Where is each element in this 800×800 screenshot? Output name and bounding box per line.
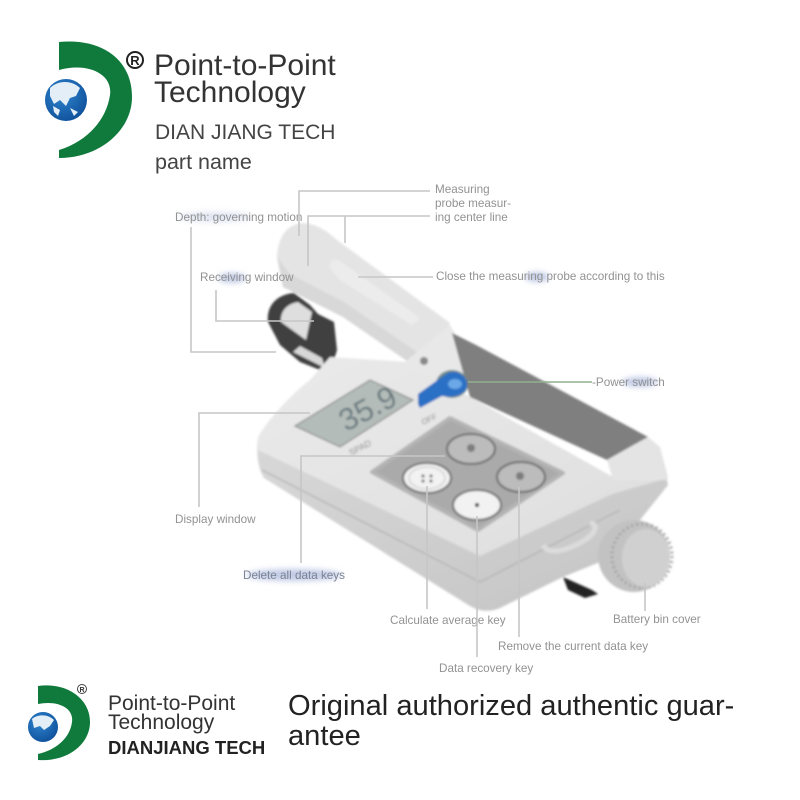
text: authenticity guarantee bbox=[288, 690, 734, 752]
logo: bottom crescent and globe bbox=[28, 684, 90, 760]
callout: data recovery key: Data recovery key bbox=[439, 662, 533, 675]
callout: remove current data key: Remove the current data key bbox=[498, 640, 648, 653]
text: DIAN JIANG TECH: DIAN JIANG TECH bbox=[155, 121, 335, 144]
logo: bottom crescent and globe: R bbox=[79, 687, 85, 694]
text: footer brand: DIANJIANG TECH bbox=[108, 737, 265, 758]
logo: top crescent and globe bbox=[45, 41, 143, 158]
key: delete all bbox=[447, 434, 495, 464]
clamp bbox=[268, 293, 337, 374]
key: calculate average bbox=[403, 463, 451, 493]
callout: depth governing motion bbox=[175, 211, 302, 352]
callout: display window bbox=[175, 413, 310, 526]
battery cover dial bbox=[588, 510, 680, 602]
heading: company name: Technology bbox=[154, 76, 306, 109]
heading: footer company name: Technology bbox=[108, 711, 215, 734]
callout: depth governing motion: Depth: governing motion bbox=[175, 211, 302, 224]
callout: display window: Display window bbox=[175, 513, 256, 526]
strap loop bbox=[543, 523, 595, 551]
callout: measuring probe center line: probe measur- bbox=[435, 197, 511, 210]
callout: receiving window bbox=[200, 271, 314, 321]
heading: company name bbox=[154, 49, 336, 109]
device side body bbox=[257, 438, 668, 611]
off label: OFF bbox=[420, 412, 438, 427]
heading: footer company name: Point-to-Point bbox=[108, 692, 235, 715]
blue blotches behind labels bbox=[179, 212, 658, 581]
heading: company name: Point-to-Point bbox=[154, 49, 336, 82]
key: remove current bbox=[497, 462, 545, 492]
callout: calculate average key: Calculate average key bbox=[390, 614, 506, 627]
hinge bbox=[405, 325, 470, 393]
callout: battery bin cover: Battery bin cover bbox=[613, 613, 701, 626]
display window: 35.9 bbox=[333, 379, 403, 438]
model text: SPAD bbox=[347, 438, 373, 458]
callout: delete all data keys: Delete all data keys bbox=[243, 569, 345, 582]
key: data recovery bbox=[453, 490, 501, 520]
device illustration bbox=[257, 223, 680, 611]
callout: measuring probe center line: Measuring bbox=[435, 183, 490, 196]
callout: close the measuring probe: Close the measuring probe according to this bbox=[436, 270, 665, 283]
probe arm bbox=[277, 223, 450, 363]
display window bbox=[295, 379, 413, 447]
grey side panel bbox=[452, 333, 648, 460]
text: authenticity guarantee: antee bbox=[288, 720, 361, 752]
blue power switch bbox=[418, 370, 468, 408]
dark base bbox=[563, 577, 598, 598]
callout: measuring probe center line bbox=[299, 183, 511, 266]
text: part name: part name bbox=[155, 150, 252, 174]
logo: top crescent and globe: R bbox=[130, 53, 140, 68]
heading: footer company name bbox=[108, 692, 235, 734]
text: authenticity guarantee: Original authorized authentic guar- bbox=[288, 690, 734, 722]
callout: receiving window: Receiving window bbox=[200, 271, 294, 284]
keypad bbox=[372, 418, 563, 530]
callout: measuring probe center line: ing center line bbox=[435, 211, 508, 224]
callout: delete all data keys bbox=[243, 456, 445, 582]
callout: power switch: -Power switch bbox=[592, 376, 665, 389]
callout: battery bin cover bbox=[613, 583, 701, 626]
